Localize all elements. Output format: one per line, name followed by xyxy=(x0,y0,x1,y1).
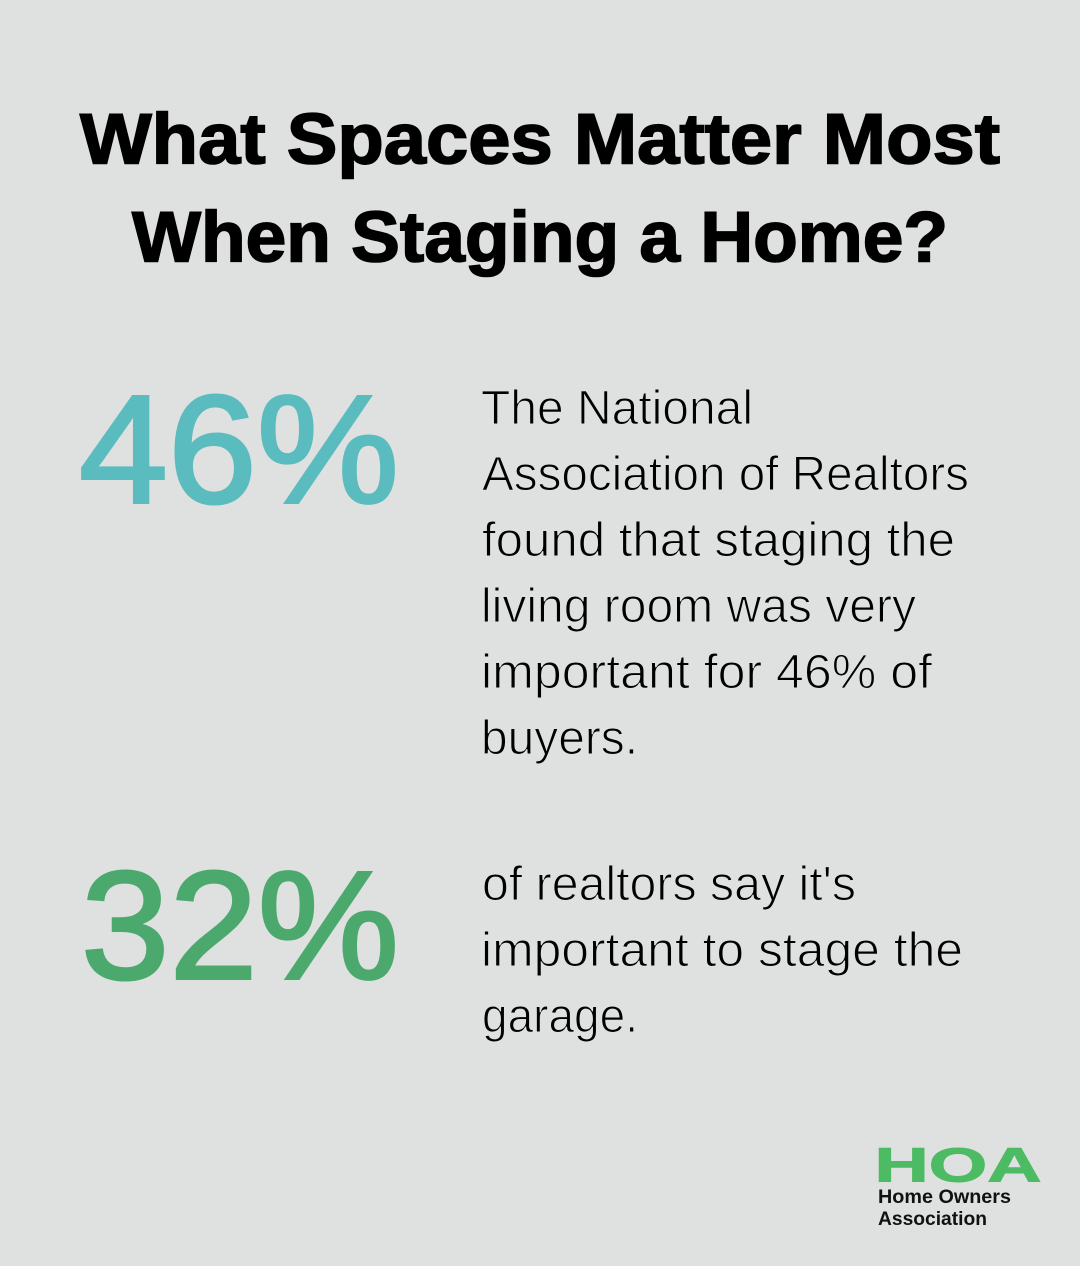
text block: garage statistic: important to stage the xyxy=(481,924,963,977)
text block: living room statistic: buyers. xyxy=(481,712,638,765)
text block: garage statistic: of realtors say it's xyxy=(482,858,856,911)
text block: living room statistic: found that staging the xyxy=(482,514,955,567)
title: When Staging a Home? xyxy=(132,198,948,278)
text block: living room statistic: Association of Realtors xyxy=(482,448,969,501)
stat: 32%: 32% xyxy=(81,840,399,1012)
logo text: organisation name: Home Owners xyxy=(878,1187,1011,1208)
text block: living room statistic: living room was very xyxy=(481,580,916,633)
logo: Home Owners Association xyxy=(874,1140,1042,1230)
logo text: organisation name: Association xyxy=(878,1209,987,1230)
text block: garage statistic xyxy=(481,858,963,1043)
logo mark: HOA letters: HOA xyxy=(874,1140,1042,1192)
text block: living room statistic xyxy=(481,382,969,765)
text block: living room statistic: important for 46% of xyxy=(481,646,933,699)
title: What Spaces Matter Most xyxy=(80,100,1000,180)
stat: 46%: 46% xyxy=(79,364,399,536)
text block: living room statistic: The National xyxy=(481,382,753,435)
title xyxy=(80,100,1000,278)
text block: garage statistic: garage. xyxy=(482,990,638,1043)
logo text: organisation name xyxy=(878,1187,1011,1230)
